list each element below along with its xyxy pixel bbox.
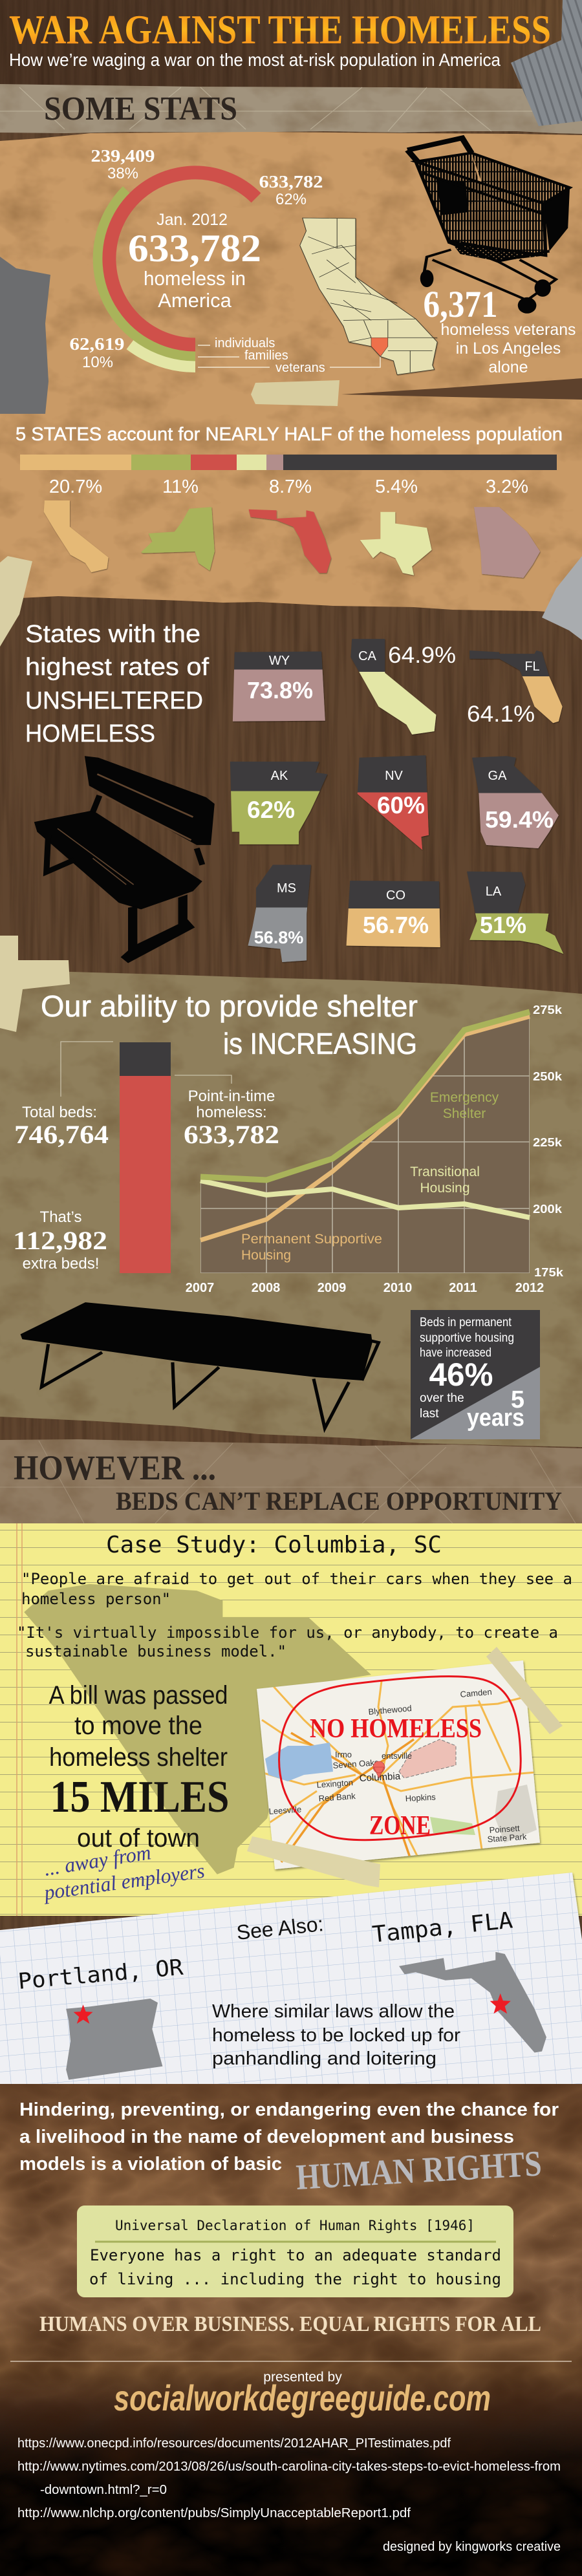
panel: kraft paper stats xyxy=(0,132,582,614)
bar: beds vs homeless xyxy=(61,1042,232,1273)
heading: shelter increasing: is INCREASING xyxy=(223,1027,417,1060)
legend leader lines: individuals xyxy=(215,336,275,350)
map labels: Irmo xyxy=(335,1750,352,1759)
state card labels: FL xyxy=(524,660,540,674)
map labels: State Park xyxy=(487,1832,527,1844)
donut labels: America xyxy=(158,289,232,312)
text: bill passed: homeless shelter xyxy=(49,1743,228,1772)
heading: five states: 5 STATES account for NEARLY HALF of the homeless population xyxy=(16,424,563,445)
tape: duct left xyxy=(0,257,50,414)
bar labels xyxy=(13,1088,279,1272)
line chart: beds by type: 200k xyxy=(533,1203,563,1216)
panel: graph paper xyxy=(0,1873,582,2084)
text: similar laws xyxy=(212,2001,460,2069)
state percentages: 20.7% xyxy=(49,477,102,497)
state percentages: 5.4% xyxy=(375,477,418,497)
state card labels: MS xyxy=(277,881,296,896)
text: bill passed: A bill was passed xyxy=(49,1681,228,1710)
statement text: Hindering, preventing, or endangering even the chance for xyxy=(19,2099,559,2120)
callout: 46 percent: Beds in permanent xyxy=(420,1316,512,1329)
wood gap between kraft sheets xyxy=(341,378,582,400)
heading: shelter increasing: Our ability to provide shelter xyxy=(41,989,418,1023)
donut labels: 633,782 xyxy=(259,172,323,191)
map: california counties xyxy=(300,218,437,374)
heading: unsheltered: States with the xyxy=(25,621,200,648)
map labels: entsville xyxy=(382,1751,412,1761)
quote: cars: homeless person" xyxy=(21,1590,171,1608)
callout: 46 percent: have increased xyxy=(420,1346,491,1360)
quote: business: "It's virtually impossible for us, or anybody, to create a xyxy=(17,1624,558,1642)
donut labels: 633,782 xyxy=(128,227,261,270)
chart: homeless donut xyxy=(98,173,256,367)
credit: designed by kingworks creative xyxy=(383,2540,561,2554)
line chart: beds by type xyxy=(186,1004,564,1295)
text: see also: See Also: xyxy=(235,1912,325,1944)
map labels: Camden xyxy=(460,1687,492,1699)
veterans stat: 6,371 xyxy=(423,283,498,325)
heading: unsheltered: highest rates of xyxy=(25,654,209,681)
callout: 46 percent xyxy=(411,1310,540,1439)
callout: universal declaration: Everyone has a right to an adequate standard xyxy=(90,2246,501,2264)
header wood panel xyxy=(0,0,582,88)
line chart: beds by type: 2011 xyxy=(449,1281,477,1295)
icon: cot xyxy=(21,1302,378,1428)
legend leader lines xyxy=(198,336,380,375)
legend leader lines: veterans xyxy=(275,361,325,375)
panel: olive paper shelter xyxy=(0,970,582,1447)
line chart: beds by type: Emergency xyxy=(430,1090,499,1105)
map pin xyxy=(373,1761,385,1778)
quote: business: sustainable business model." xyxy=(25,1642,286,1660)
state card labels: CO xyxy=(386,888,405,903)
state card labels xyxy=(247,643,554,947)
los angeles county xyxy=(371,338,388,356)
state card labels: 64.1% xyxy=(467,702,535,727)
map labels: Blythewood xyxy=(368,1703,412,1717)
line chart: beds by type: 2012 xyxy=(515,1281,544,1295)
line: emergency xyxy=(200,1012,530,1180)
callout: 46 percent: last xyxy=(420,1407,439,1421)
statement text: models is a violation of basic xyxy=(19,2154,282,2174)
state percentages: 8.7% xyxy=(269,477,312,497)
tape: silver right xyxy=(542,556,582,640)
heading: shelter increasing xyxy=(41,989,418,1060)
map labels: Red Bank xyxy=(318,1791,356,1803)
state cards: unsheltered rates xyxy=(230,639,563,962)
state card labels: 56.7% xyxy=(363,912,429,938)
map labels: Leesville xyxy=(268,1804,302,1816)
heading: case study: Case Study: Columbia, SC xyxy=(106,1532,442,1558)
tape: beige left xyxy=(0,556,32,647)
callout: 46 percent: 46% xyxy=(429,1357,493,1393)
callout: universal declaration xyxy=(77,2206,513,2297)
line chart: beds by type: 225k xyxy=(533,1136,563,1149)
legend leader lines: families xyxy=(244,349,288,363)
text: similar laws: Where similar laws allow the xyxy=(212,2001,455,2022)
sources: http://www.nlchp.org/content/pubs/SimplyUnacceptableReport1.pdf xyxy=(17,2506,411,2520)
subtitle: How we’re waging a war on the most at-risk population in America xyxy=(9,50,501,70)
heading: some stats: SOME STATS xyxy=(44,91,237,127)
veterans stat: homeless veterans xyxy=(441,321,576,339)
callout: 46 percent: supportive housing xyxy=(420,1331,514,1345)
donut labels: 38% xyxy=(107,165,138,182)
bar labels: 746,764 xyxy=(14,1120,109,1149)
sources: http://www.nytimes.com/2013/08/26/us/south-carolina-city-takes-steps-to-evict-homeless-from xyxy=(17,2460,561,2474)
state card labels: 64.9% xyxy=(388,643,456,668)
heading: unsheltered xyxy=(25,621,209,747)
state percentages xyxy=(49,477,528,497)
veterans stat: in Los Angeles xyxy=(456,339,561,358)
stacked bar: state shares xyxy=(20,455,557,470)
tape: map bottom xyxy=(247,1836,380,1887)
sources xyxy=(17,2436,561,2520)
veterans stat: alone xyxy=(488,358,528,376)
line: permanent supportive xyxy=(200,1016,530,1240)
bar labels: Total beds: xyxy=(22,1104,97,1121)
arc: families xyxy=(98,190,195,356)
sources: -downtown.html?_r=0 xyxy=(40,2483,167,2497)
text: similar laws: panhandling and loitering xyxy=(212,2048,436,2069)
state card labels: 59.4% xyxy=(485,806,554,833)
slogan: HUMANS OVER BUSINESS. EQUAL RIGHTS FOR ALL xyxy=(39,2312,541,2336)
line chart: beds by type: 175k xyxy=(534,1266,564,1279)
state percentages: 11% xyxy=(162,477,199,497)
state percentages: 3.2% xyxy=(486,477,528,497)
map: no homeless zone xyxy=(257,1660,543,1869)
text: bill passed: out of town xyxy=(77,1824,200,1852)
divider and presented by: presented by xyxy=(263,2370,342,2385)
icon: shopping cart xyxy=(407,138,570,314)
state shapes xyxy=(44,500,540,578)
arc: veterans xyxy=(130,345,195,367)
line chart: beds by type: Permanent Supportive xyxy=(241,1232,382,1247)
red zone outline xyxy=(279,1677,521,1840)
text: bill passed: to move the xyxy=(74,1712,202,1740)
tape: beige corner xyxy=(0,936,70,1032)
tape: map right xyxy=(486,1647,563,1734)
text: similar laws: homeless to be locked up for xyxy=(212,2025,460,2046)
line chart: beds by type: Shelter xyxy=(443,1106,486,1121)
state card labels: 62% xyxy=(247,797,295,823)
line chart: beds by type: 275k xyxy=(533,1004,563,1016)
panel: cardboard strip some stats xyxy=(0,84,582,134)
bar labels: homeless: xyxy=(196,1104,267,1121)
map: oregon xyxy=(66,1999,162,2080)
bar labels: Point-in-time xyxy=(188,1088,275,1105)
map: florida xyxy=(399,1952,546,2052)
state card labels: 51% xyxy=(480,912,526,938)
heading: human rights: HUMAN RIGHTS xyxy=(295,2143,543,2198)
callout: universal declaration: Universal Declaration of Human Rights [1946] xyxy=(115,2218,475,2233)
line: transitional xyxy=(200,1181,530,1218)
line chart: beds by type: 2010 xyxy=(383,1281,412,1295)
line chart: beds by type: 2007 xyxy=(186,1281,214,1295)
heading: unsheltered: HOMELESS xyxy=(25,720,155,747)
state card labels: 73.8% xyxy=(247,677,313,703)
lake xyxy=(265,1743,333,1781)
panel: crumpled brown footer xyxy=(0,2084,582,2576)
veterans stat xyxy=(423,283,576,376)
icon: bench xyxy=(34,756,215,963)
map labels: Hopkins xyxy=(405,1792,436,1803)
panel: yellow legal pad xyxy=(0,1523,582,1916)
state card labels: AK xyxy=(271,769,288,783)
state card labels: 60% xyxy=(377,792,425,819)
donut labels xyxy=(70,146,323,371)
map labels: Seven Oaks xyxy=(332,1757,379,1770)
donut labels: 62% xyxy=(275,191,307,208)
state card labels: LA xyxy=(486,885,502,899)
marker: tampa star xyxy=(490,1993,511,2013)
map labels xyxy=(268,1687,527,1844)
line chart: beds by type: 2009 xyxy=(318,1281,346,1295)
panel: cardboard however xyxy=(0,1439,582,1526)
statement text: a livelihood in the name of development and business xyxy=(19,2127,514,2147)
callout: universal declaration: of living ... including the right to housing xyxy=(89,2270,501,2288)
text: bill passed xyxy=(49,1681,229,1852)
shape: south carolina silhouette xyxy=(24,1584,371,1874)
map: no homeless zone: ZONE xyxy=(369,1811,431,1841)
bar labels: 112,982 xyxy=(13,1226,107,1255)
heading: however: HOWEVER ... xyxy=(14,1448,216,1487)
state card labels: 56.8% xyxy=(254,928,303,947)
text: bill passed: 15 MILES xyxy=(50,1772,229,1822)
map labels: Lexington xyxy=(316,1777,353,1790)
callout: 46 percent: 5 xyxy=(511,1386,524,1413)
bar labels: That’s xyxy=(40,1208,81,1226)
line chart: beds by type: Housing xyxy=(241,1248,291,1263)
callout: 46 percent: years xyxy=(467,1404,524,1432)
state card labels: WY xyxy=(269,654,290,668)
callout: 46 percent: over the xyxy=(420,1391,464,1405)
bar labels: 633,782 xyxy=(184,1120,279,1149)
line chart: beds by type: 2008 xyxy=(252,1281,280,1295)
sources: https://www.onecpd.info/resources/documents/2012AHAR_PITestimates.pdf xyxy=(17,2436,451,2451)
tape: beige center xyxy=(251,380,339,406)
bar labels: extra beds! xyxy=(23,1255,99,1272)
donut labels: homeless in xyxy=(144,267,246,290)
map labels: Columbia xyxy=(359,1771,401,1784)
quote: business xyxy=(17,1624,558,1660)
line chart: beds by type: Housing xyxy=(420,1181,470,1196)
handwritten note: potential employers xyxy=(41,1858,206,1904)
line chart: beds by type: Transitional xyxy=(410,1165,480,1179)
donut labels: 10% xyxy=(82,354,113,371)
marker: portland star xyxy=(74,2004,93,2024)
line chart: beds by type: 250k xyxy=(533,1070,563,1083)
state card labels: NV xyxy=(385,769,404,783)
map: no homeless zone: NO HOMELESS xyxy=(310,1714,482,1744)
donut labels: 239,409 xyxy=(91,146,155,166)
text: tampa: Tampa, FLA xyxy=(371,1907,514,1948)
text: portland: Portland, OR xyxy=(17,1955,184,1995)
statement text xyxy=(19,2099,559,2174)
donut labels: 62,619 xyxy=(70,334,124,354)
donut labels: Jan. 2012 xyxy=(156,211,228,229)
tape: corrugated top right xyxy=(511,0,582,126)
quote: cars: "People are afraid to get out of their cars when they see a xyxy=(21,1570,572,1588)
heading: unsheltered: UNSHELTERED xyxy=(25,687,203,714)
city limits xyxy=(399,1739,456,1778)
map labels: Poinsett xyxy=(489,1823,520,1835)
quote: cars xyxy=(21,1570,572,1608)
arc: individuals xyxy=(109,173,256,345)
state card labels: CA xyxy=(358,649,377,663)
handwritten note: ... away from xyxy=(42,1840,153,1880)
state card labels: GA xyxy=(488,769,507,783)
